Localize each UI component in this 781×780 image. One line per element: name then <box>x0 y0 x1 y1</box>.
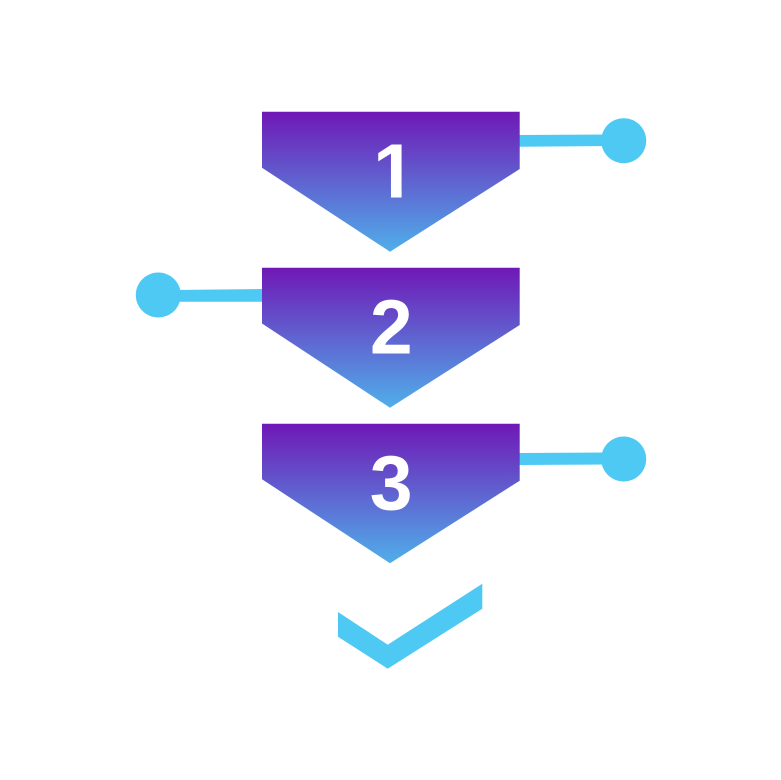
step 1 arrow <box>262 112 520 252</box>
connector 1 with dot <box>519 118 646 163</box>
step 2 arrow <box>262 268 520 408</box>
number 2: 2 <box>370 284 413 370</box>
connector 3 with dot <box>519 436 646 482</box>
number 3: 3 <box>370 440 413 526</box>
step 3 arrow <box>262 424 520 563</box>
connector 2 with dot <box>136 272 263 318</box>
chevron <box>338 584 482 669</box>
number 1: 1 <box>373 128 416 214</box>
